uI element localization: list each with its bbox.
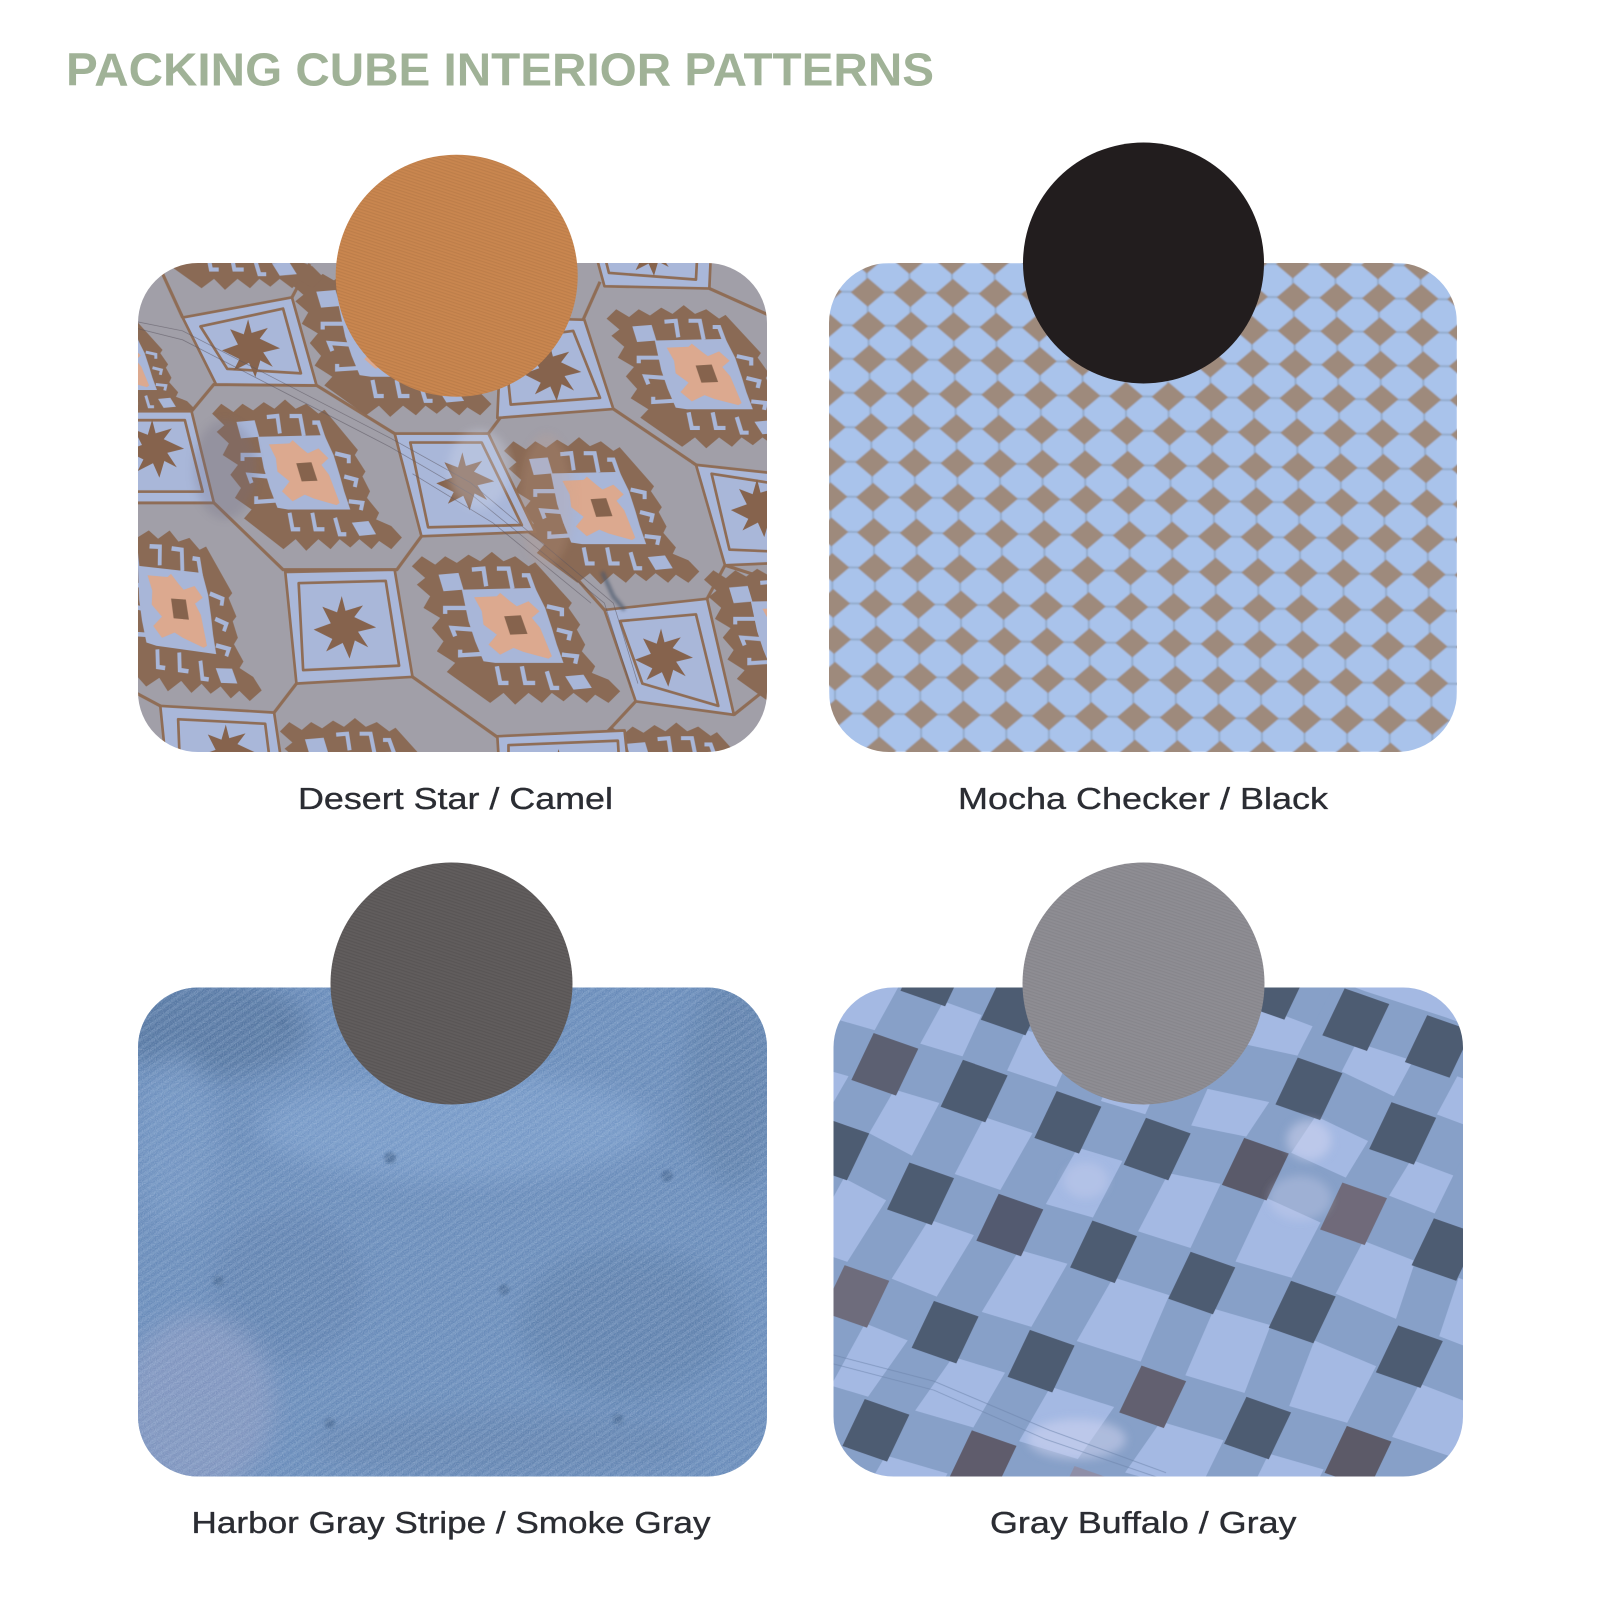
label: Gray Buffalo / Gray: Gray Buffalo / Gray <box>990 1505 1297 1540</box>
pattern swatch: gray buffalo check <box>834 988 1463 1476</box>
fabric circle: smoke gray <box>330 862 572 1104</box>
title: PACKING CUBE INTERIOR PATTERNS <box>66 44 934 96</box>
panel: Desert Star / Camel <box>138 154 767 810</box>
label: Desert Star / Camel: Desert Star / Camel <box>298 781 613 816</box>
pattern swatch: mocha checker <box>829 263 1457 752</box>
fabric circle: black <box>1023 142 1264 384</box>
label: Harbor Gray Stripe / Smoke Gray: Harbor Gray Stripe / Smoke Gray <box>192 1505 711 1540</box>
panel: Gray Buffalo / Gray <box>834 862 1463 1540</box>
pattern swatch: desert star <box>138 263 767 752</box>
panel: Mocha Checker / Black <box>829 142 1457 810</box>
fabric circle: camel <box>336 155 578 397</box>
fabric circle: gray <box>1022 862 1264 1104</box>
pattern swatch: harbor gray stripe <box>138 988 767 1476</box>
label: Mocha Checker / Black: Mocha Checker / Black <box>958 781 1329 816</box>
panel: Harbor Gray Stripe / Smoke Gray <box>113 862 783 1540</box>
